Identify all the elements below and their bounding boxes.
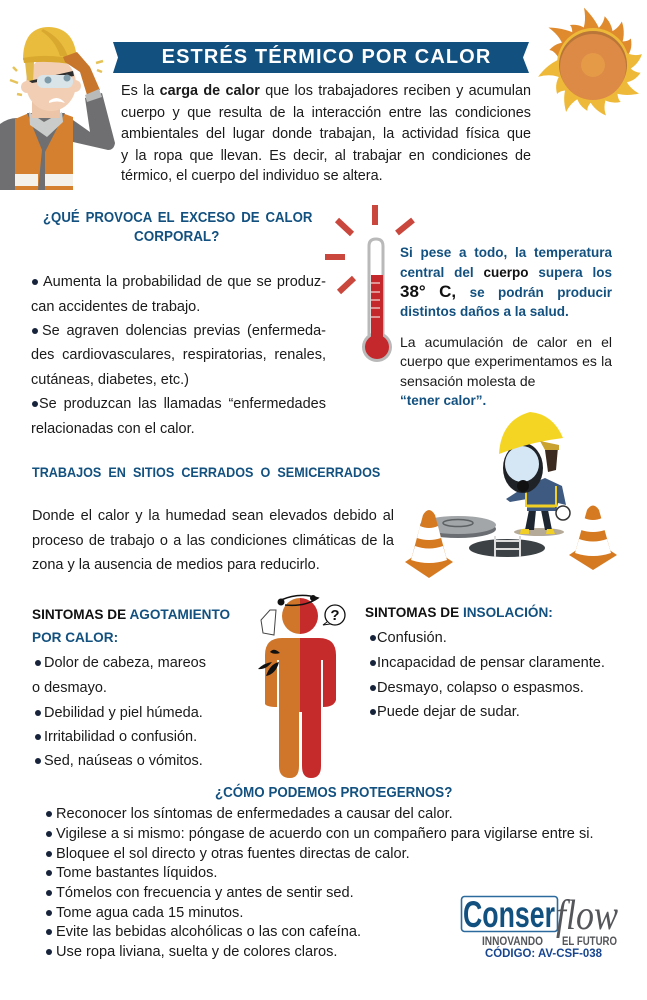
intro text: cuerpo y que resulta de la interacción entre las condiciones	[121, 105, 531, 121]
list: protección: Tómelos con frecuencia y antes de sentir sed.	[56, 885, 354, 901]
icon: human figure with symptoms: ?	[330, 607, 340, 624]
callout: temperature: 38° C, se podrán producir	[400, 282, 612, 301]
list: protección: Use ropa liviana, suelta y de colores claros.	[56, 944, 337, 960]
list: consequences	[31, 274, 326, 437]
list: protección	[46, 806, 594, 960]
panel: insolación: Puede dejar de sudar.	[377, 704, 520, 720]
icon: worker at manhole with cones	[405, 412, 617, 578]
callout: temperature	[400, 245, 612, 408]
callout: temperature: La acumulación de calor en el	[400, 334, 612, 350]
icon: Conserflow logo: flow	[556, 893, 618, 939]
text: sitios cerrados: Donde el calor y la humedad sean elevados debido al	[32, 508, 394, 524]
panel: agotamiento por calor: o desmayo.	[32, 680, 107, 696]
icon: thermometer	[325, 205, 413, 362]
list: protección: Evite las bebidas alcohólicas o las con cafeína.	[56, 924, 361, 940]
panel: agotamiento por calor	[32, 607, 230, 769]
heading: exceso de calor: ¿QUÉ PROVOCA EL EXCESO DE CALOR	[43, 210, 312, 226]
list: protección: Tome agua cada 15 minutos.	[56, 905, 243, 921]
list: consequences: Se produzcan las llamadas “enfermedades	[39, 396, 326, 412]
callout: temperature: cuerpo que experimentamos es la	[400, 353, 612, 369]
text: sitios cerrados: proceso de trabajo o a las condiciones climáticas de la	[32, 533, 394, 549]
panel: insolación: Incapacidad de pensar claramente.	[377, 655, 605, 671]
icon: Conserflow logo: INNOVANDO	[482, 936, 543, 948]
callout: temperature: sensación molesta de	[400, 373, 535, 389]
icon: human figure with symptoms	[258, 595, 345, 778]
panel: agotamiento por calor: Irritabilidad o confusión.	[44, 729, 197, 745]
heading: sitios cerrados: TRABAJOS EN SITIOS CERRADOS O SEMICERRADOS	[32, 464, 380, 480]
title banner	[113, 42, 529, 73]
callout: temperature: distintos daños a la salud.	[400, 304, 569, 319]
panel: agotamiento por calor: Dolor de cabeza, mareos	[44, 655, 206, 671]
list: protección: Vigilese a si mismo: póngase de acuerdo con un compañero para vigilarse entre si.	[56, 826, 594, 842]
icon: Conserflow logo: CÓDIGO: AV-CSF-038	[485, 945, 602, 960]
panel: insolación: Desmayo, colapso o espasmos.	[377, 680, 584, 696]
icon: Conserflow logo: EL FUTURO	[562, 936, 617, 948]
callout: temperature: “tener calor”.	[400, 393, 486, 408]
panel: agotamiento por calor: POR CALOR:	[32, 630, 118, 645]
list: consequences: can accidentes de trabajo.	[31, 299, 200, 315]
callout: temperature: Si pese a todo, la temperatura	[400, 245, 612, 260]
list: consequences: Se agraven dolencias previas (enfermeda-	[42, 323, 326, 339]
list: consequences: relacionadas con el calor.	[31, 421, 195, 437]
panel: insolación	[365, 604, 605, 720]
title banner: ESTRÉS TÉRMICO POR CALOR	[162, 46, 491, 68]
panel: insolación: Confusión.	[377, 630, 447, 646]
intro text	[121, 83, 531, 184]
icon: Conserflow logo	[462, 893, 618, 960]
heading: exceso de calor	[43, 209, 312, 245]
list: protección: Bloquee el sol directo y otras fuentes directas de calor.	[56, 846, 410, 862]
callout: temperature: central del cuerpo supera los	[400, 265, 612, 280]
list: protección: Tome bastantes líquidos.	[56, 865, 217, 881]
panel: agotamiento por calor: SINTOMAS DE AGOTAMIENTO	[32, 607, 230, 622]
heading: exceso de calor: CORPORAL?	[134, 229, 219, 245]
list: consequences: Aumenta la probabilidad de que se produz-	[43, 274, 326, 290]
intro text: térmico, el cuerpo del individuo se altera.	[121, 168, 383, 184]
icon: worker with hard hat	[0, 27, 115, 190]
list: consequences: des cardiovasculares, respiratorias, renales,	[31, 347, 326, 363]
text: sitios cerrados	[32, 508, 394, 573]
icon: sun	[536, 6, 644, 118]
text: sitios cerrados: zona y la ausencia de medios para reducirlo.	[32, 557, 320, 573]
panel: agotamiento por calor: Sed, naúseas o vómitos.	[44, 753, 203, 769]
list: protección: Reconocer los síntomas de enfermedades a causar del calor.	[56, 806, 453, 822]
icon: Conserflow logo: Conser	[463, 894, 555, 935]
heading: protección: ¿CÓMO PODEMOS PROTEGERNOS?	[215, 785, 452, 801]
panel: insolación: SINTOMAS DE INSOLACIÓN:	[365, 605, 553, 620]
panel: agotamiento por calor: Debilidad y piel húmeda.	[44, 705, 203, 721]
list: consequences: cutáneas, diabetes, etc.)	[31, 372, 189, 388]
